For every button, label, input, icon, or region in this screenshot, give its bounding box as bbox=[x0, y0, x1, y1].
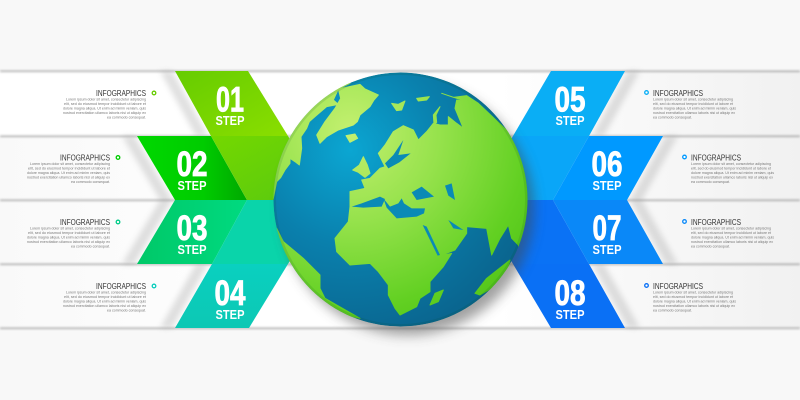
text block 01: dolore magna aliqua. Ut enim ad minim veniam, quis bbox=[63, 106, 146, 110]
text block 07: dolore magna aliqua. Ut enim ad minim veniam, quis bbox=[691, 234, 774, 240]
text block 05: ea commodo consequat. bbox=[653, 114, 692, 120]
text block 05 bbox=[645, 89, 736, 120]
text block 06: dolore magna aliqua. Ut enim ad minim veniam, quis bbox=[691, 170, 774, 175]
text block 08: nostrud exercitation ullamco laboris nisi ut aliquip ex bbox=[653, 303, 735, 308]
step 03 label bbox=[176, 209, 208, 257]
ribbon 08 upper fold bbox=[475, 200, 589, 264]
step 06 label: 06 bbox=[592, 145, 622, 184]
step 05 label: 05 bbox=[554, 80, 586, 120]
text block 04: dolore magna aliqua. Ut enim ad minim veniam, quis bbox=[63, 298, 146, 304]
text block 05: Lorem ipsum dolor sit amet, consectetur adipiscing bbox=[653, 96, 733, 102]
step 01 label: 01 bbox=[216, 80, 244, 120]
text block 06: elit, sed do eiusmod tempor incididunt ut labore et bbox=[691, 166, 772, 170]
text block 08: dolore magna aliqua. Ut enim ad minim veniam, quis bbox=[653, 298, 736, 304]
left step ribbons bbox=[137, 71, 325, 328]
eurasia and africa bbox=[334, 92, 528, 316]
south america bbox=[270, 228, 360, 318]
text block 01 bbox=[63, 89, 156, 120]
step 02 label: STEP bbox=[178, 179, 206, 193]
text block 08: INFOGRAPHICS bbox=[653, 282, 703, 291]
text block 08: Lorem ipsum dolor sit amet, consectetur adipiscing bbox=[653, 290, 733, 294]
greenland bbox=[317, 84, 378, 143]
text block 06: nostrud exercitation ullamco laboris nisi ut aliquip ex bbox=[691, 174, 773, 180]
step 07 label bbox=[592, 209, 622, 257]
text block 07: INFOGRAPHICS bbox=[691, 218, 741, 227]
text block 02 bbox=[27, 154, 120, 184]
text block 02: Lorem ipsum dolor sit amet, consectetur adipiscing bbox=[30, 161, 110, 166]
globe shadow bbox=[282, 83, 534, 335]
ribbon 07 bbox=[553, 200, 663, 264]
step 07 label: 07 bbox=[592, 209, 622, 248]
step 04 label bbox=[214, 274, 246, 322]
step 06 label: STEP bbox=[592, 179, 622, 193]
step 03 label: 03 bbox=[176, 209, 208, 248]
baltic sea bbox=[385, 140, 411, 168]
caspian sea bbox=[445, 183, 455, 200]
text block 03: Lorem ipsum dolor sit amet, consectetur adipiscing bbox=[30, 226, 110, 230]
western mediterranean bbox=[352, 197, 385, 208]
text block 05: elit, sed do eiusmod tempor incididunt ut labore et bbox=[653, 101, 734, 106]
step 04 label: 04 bbox=[214, 274, 246, 313]
step 01 label bbox=[216, 80, 244, 128]
text block 04: elit, sed do eiusmod tempor incididunt ut labore et bbox=[64, 294, 147, 299]
text block 08 bbox=[645, 282, 736, 312]
step 05 label bbox=[554, 80, 586, 128]
step 04 label: STEP bbox=[216, 308, 244, 322]
text block 04: ea commodo consequat. bbox=[107, 308, 146, 312]
ribbon 03 bbox=[137, 200, 247, 264]
text block 07: Lorem ipsum dolor sit amet, consectetur adipiscing bbox=[691, 226, 771, 230]
text block 01: Lorem ipsum dolor sit amet, consectetur adipiscing bbox=[66, 96, 146, 102]
svalbard bbox=[392, 101, 405, 111]
step 01 label: STEP bbox=[216, 114, 244, 128]
text block 02: dolore magna aliqua. Ut enim ad minim veniam, quis bbox=[27, 170, 110, 175]
step 08 label: STEP bbox=[556, 308, 584, 322]
text block 01: nostrud exercitation ullamco laboris nisi ut aliquip ex bbox=[63, 110, 146, 115]
text block 08: elit, sed do eiusmod tempor incididunt ut labore et bbox=[653, 294, 734, 299]
text block 03: ea commodo consequat. bbox=[71, 244, 110, 248]
step 08 label bbox=[554, 274, 586, 322]
iceland bbox=[346, 134, 358, 142]
step 07 label: STEP bbox=[592, 243, 622, 257]
british isles bbox=[353, 157, 370, 177]
ribbon 01 bbox=[175, 71, 288, 136]
eastern mediterranean bbox=[383, 198, 425, 218]
text block 07 bbox=[683, 218, 774, 248]
text block 04: Lorem ipsum dolor sit amet, consectetur adipiscing bbox=[66, 290, 146, 294]
text block 03: elit, sed do eiusmod tempor incididunt ut labore et bbox=[28, 230, 111, 235]
text block 06: ea commodo consequat. bbox=[691, 179, 730, 184]
madagascar bbox=[430, 290, 443, 305]
ribbon 05 bbox=[513, 71, 625, 136]
text block 02: INFOGRAPHICS bbox=[60, 154, 110, 162]
globe bbox=[274, 72, 528, 326]
text block 06: Lorem ipsum dolor sit amet, consectetur adipiscing bbox=[691, 161, 771, 166]
text block 07: elit, sed do eiusmod tempor incididunt ut labore et bbox=[691, 230, 772, 235]
step 05 label: STEP bbox=[556, 114, 584, 128]
text block 06 bbox=[683, 154, 774, 184]
franz josef land bbox=[417, 97, 429, 101]
text block 04: INFOGRAPHICS bbox=[96, 282, 146, 291]
text block 03: dolore magna aliqua. Ut enim ad minim veniam, quis bbox=[27, 234, 110, 240]
ribbon 04 upper fold bbox=[212, 200, 325, 264]
text block 06: INFOGRAPHICS bbox=[691, 154, 741, 162]
red sea bbox=[423, 225, 440, 256]
text block 04 bbox=[63, 282, 156, 312]
text block 04: nostrud exercitation ullamco laboris nisi ut aliquip ex bbox=[63, 303, 146, 308]
persian gulf bbox=[448, 220, 463, 230]
text block 03: nostrud exercitation ullamco laboris nisi ut aliquip ex bbox=[27, 239, 110, 244]
text block 05: INFOGRAPHICS bbox=[653, 89, 703, 98]
black sea bbox=[412, 187, 434, 200]
text block 02: nostrud exercitation ullamco laboris nisi ut aliquip ex bbox=[27, 174, 110, 180]
text block 08: ea commodo consequat. bbox=[653, 308, 692, 312]
text block 07: ea commodo consequat. bbox=[691, 244, 730, 248]
ribbon 01 lower fold bbox=[211, 136, 325, 200]
step 08 label: 08 bbox=[554, 274, 586, 313]
globe edge shading bbox=[274, 74, 526, 326]
text block 01: elit, sed do eiusmod tempor incididunt ut labore et bbox=[64, 101, 147, 106]
text block 01: INFOGRAPHICS bbox=[96, 89, 146, 98]
text block 05: nostrud exercitation ullamco laboris nisi ut aliquip ex bbox=[653, 110, 735, 115]
ribbon 06 bbox=[553, 136, 663, 200]
ribbon 04 bbox=[175, 264, 288, 328]
text block 03 bbox=[27, 218, 120, 248]
novaya zemlya bbox=[433, 107, 440, 124]
text block 03: INFOGRAPHICS bbox=[60, 218, 110, 227]
ribbon 02 bbox=[137, 136, 247, 200]
right step ribbons bbox=[475, 71, 663, 328]
text block 01: ea commodo consequat. bbox=[107, 114, 146, 120]
ribbon 05 lower fold bbox=[475, 136, 589, 200]
step 06 label bbox=[592, 145, 622, 193]
text block 02: elit, sed do eiusmod tempor incididunt ut labore et bbox=[28, 166, 111, 170]
step 02 label bbox=[176, 145, 208, 193]
north america bbox=[274, 83, 350, 200]
australia bbox=[475, 260, 510, 295]
text block 02: ea commodo consequat. bbox=[71, 179, 110, 184]
ribbon 08 bbox=[513, 264, 625, 328]
step 03 label: STEP bbox=[178, 243, 206, 257]
step 02 label: 02 bbox=[176, 145, 208, 184]
text block 07: nostrud exercitation ullamco laboris nisi ut aliquip ex bbox=[691, 239, 773, 244]
text block 05: dolore magna aliqua. Ut enim ad minim veniam, quis bbox=[653, 106, 736, 110]
